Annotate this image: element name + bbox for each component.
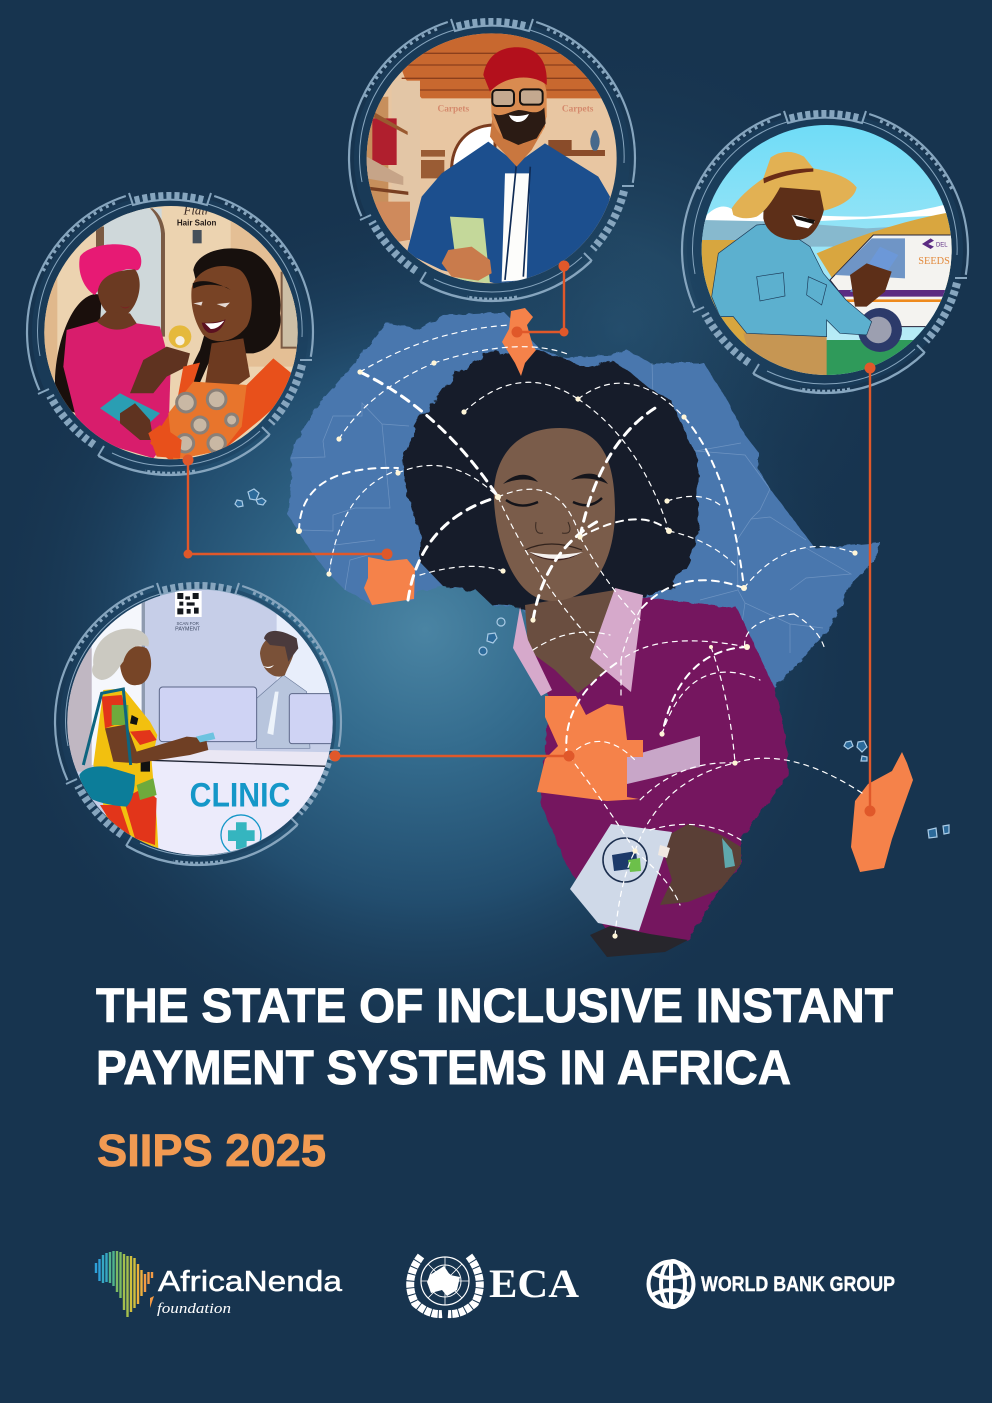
island groups: [235, 489, 949, 838]
payment routes: [299, 325, 865, 936]
circle: carpet merchant: Carpets: [438, 104, 469, 114]
circle: hair salon: Hair Salon: [177, 218, 217, 227]
connector: clinic to Angola: [330, 750, 574, 762]
title: THE STATE OF INCLUSIVE INSTANT: [96, 980, 893, 1033]
icon: globe: [648, 1261, 694, 1307]
Africa map and portrait: [235, 308, 949, 957]
logo: ECA: [410, 1256, 579, 1314]
circle: clinic: [55, 583, 341, 865]
orange country: Madagascar: [851, 752, 913, 872]
circle: clinic: SCAN FOR: [176, 621, 199, 626]
connector: merchant to Tunisia: [512, 260, 570, 338]
logo: AfricaNenda foundation: [96, 1251, 343, 1317]
logo: AfricaNenda foundation: foundation: [157, 1301, 231, 1317]
logo: AfricaNenda foundation: AfricaNenda: [158, 1266, 343, 1298]
orange country: Tunisia: [502, 308, 536, 376]
connector: salon to Ivory Coast: [182, 454, 392, 560]
woman: facial features: [503, 474, 608, 560]
woman: neck: [525, 590, 620, 693]
orange country: Angola: [537, 696, 643, 801]
orange country: Ivory Coast: [364, 557, 415, 605]
woman: shirt: [520, 597, 788, 940]
woman: collar: [513, 588, 643, 696]
circle: hair salon: Flair: [183, 204, 210, 218]
hand holding payment terminal: [570, 824, 741, 957]
icon: Africa stripes: [96, 1251, 154, 1317]
circle: farmer: DEL: [936, 243, 948, 249]
subtitle: SIIPS 2025: [97, 1125, 326, 1176]
circle: farmer: SEEDS: [918, 256, 950, 267]
woman: sleeve stripe: [627, 736, 700, 784]
logo: World Bank Group: WORLD BANK GROUP: [701, 1273, 895, 1296]
title: [96, 980, 893, 1095]
woman: face: [494, 428, 615, 601]
woman: hair: [402, 350, 700, 620]
title: PAYMENT SYSTEMS IN AFRICA: [96, 1042, 791, 1095]
circle: clinic: CLINIC: [190, 777, 290, 815]
logo: World Bank Group: [648, 1261, 895, 1307]
logo: ECA: ECA: [489, 1261, 579, 1306]
circle: hair salon: [27, 193, 313, 475]
connector: farmer to Madagascar: [864, 362, 876, 816]
icon: UN emblem: [410, 1256, 480, 1314]
circle: carpet merchant: [349, 19, 635, 301]
circle: carpet merchant: Carpets: [562, 104, 594, 114]
circle: farmer: [682, 111, 968, 393]
continent shape: [288, 312, 880, 720]
country borders: [291, 363, 851, 653]
route nodes: [296, 360, 858, 939]
circle: clinic: PAYMENT: [175, 626, 201, 632]
